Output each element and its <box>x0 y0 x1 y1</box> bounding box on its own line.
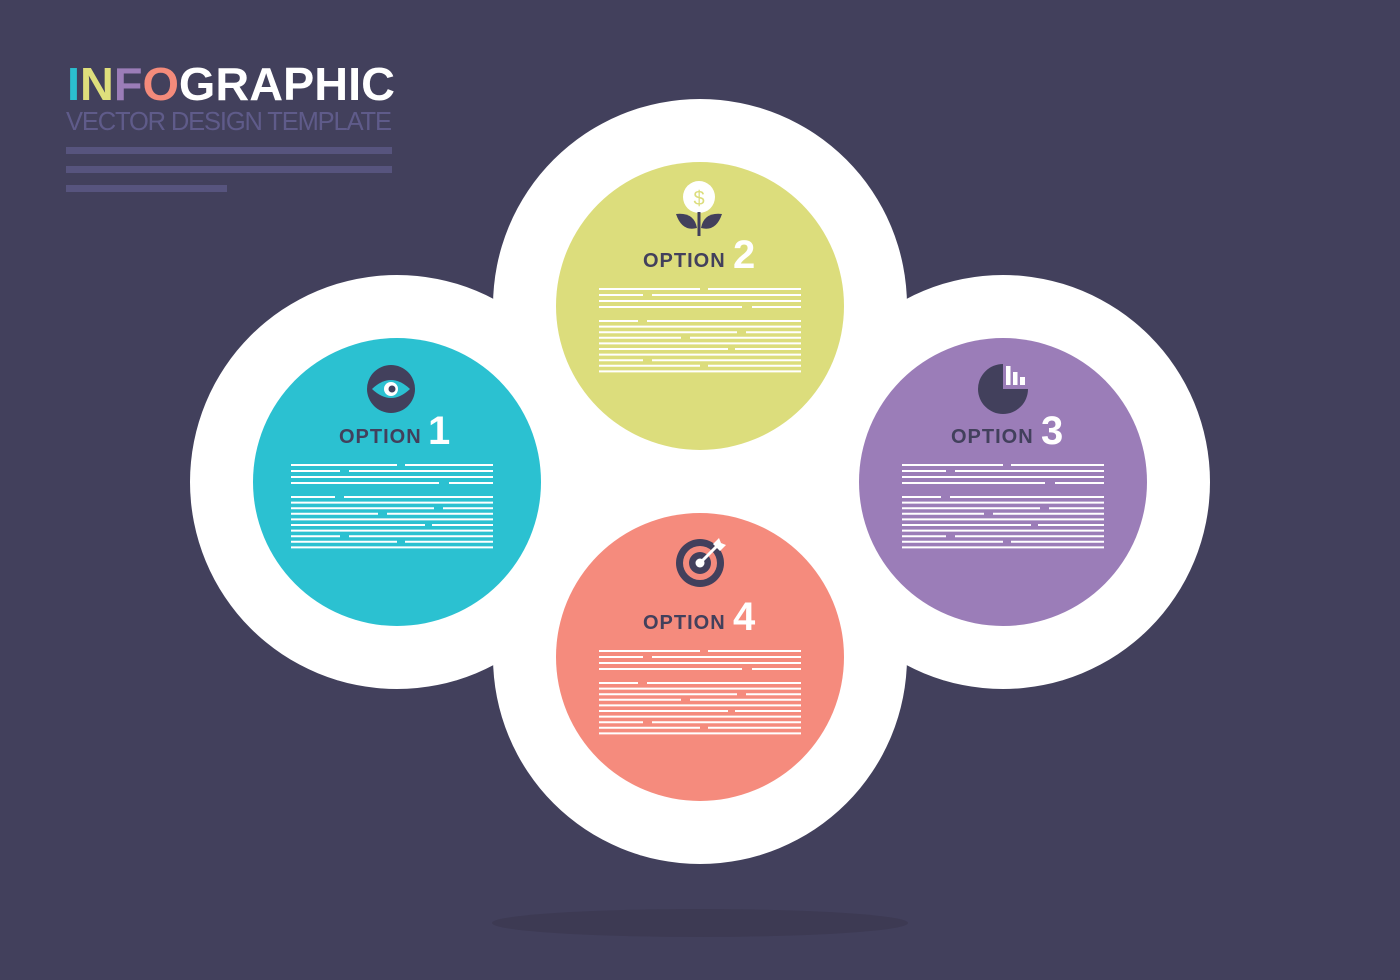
text block <box>291 465 493 547</box>
heading: option 1: OPTION <box>339 426 422 448</box>
text block <box>599 289 801 371</box>
heading: option 2 <box>643 233 755 277</box>
floor shadow <box>492 909 908 937</box>
icon: eye <box>367 365 415 413</box>
heading: option 3: OPTION <box>951 426 1034 448</box>
heading: option 2: 2 <box>733 233 755 277</box>
panel: option 4 <box>556 513 844 801</box>
heading: option 2: OPTION <box>643 250 726 272</box>
heading: option 4 <box>643 595 756 639</box>
icon: target <box>676 538 726 587</box>
heading: option 3: 3 <box>1041 409 1063 453</box>
icon: plant with coin <box>676 181 722 236</box>
text block <box>599 651 801 733</box>
heading: option 4: OPTION <box>643 612 726 634</box>
heading: option 3 <box>951 409 1063 453</box>
text block <box>902 465 1104 547</box>
panel: option 1 <box>253 338 541 626</box>
heading: option 1 <box>339 409 450 453</box>
heading: option 4: 4 <box>733 595 756 639</box>
icon: pie chart <box>978 364 1028 414</box>
title: INFOGRAPHIC <box>67 58 395 110</box>
panel: option 3 <box>859 338 1147 626</box>
panel: option 2 <box>556 162 844 450</box>
white rings <box>190 99 1210 864</box>
title placeholder bars <box>66 147 392 192</box>
icon: plant with coin: $ <box>693 188 705 210</box>
heading: option 1: 1 <box>428 409 450 453</box>
subtitle: VECTOR DESIGN TEMPLATE <box>66 108 392 136</box>
